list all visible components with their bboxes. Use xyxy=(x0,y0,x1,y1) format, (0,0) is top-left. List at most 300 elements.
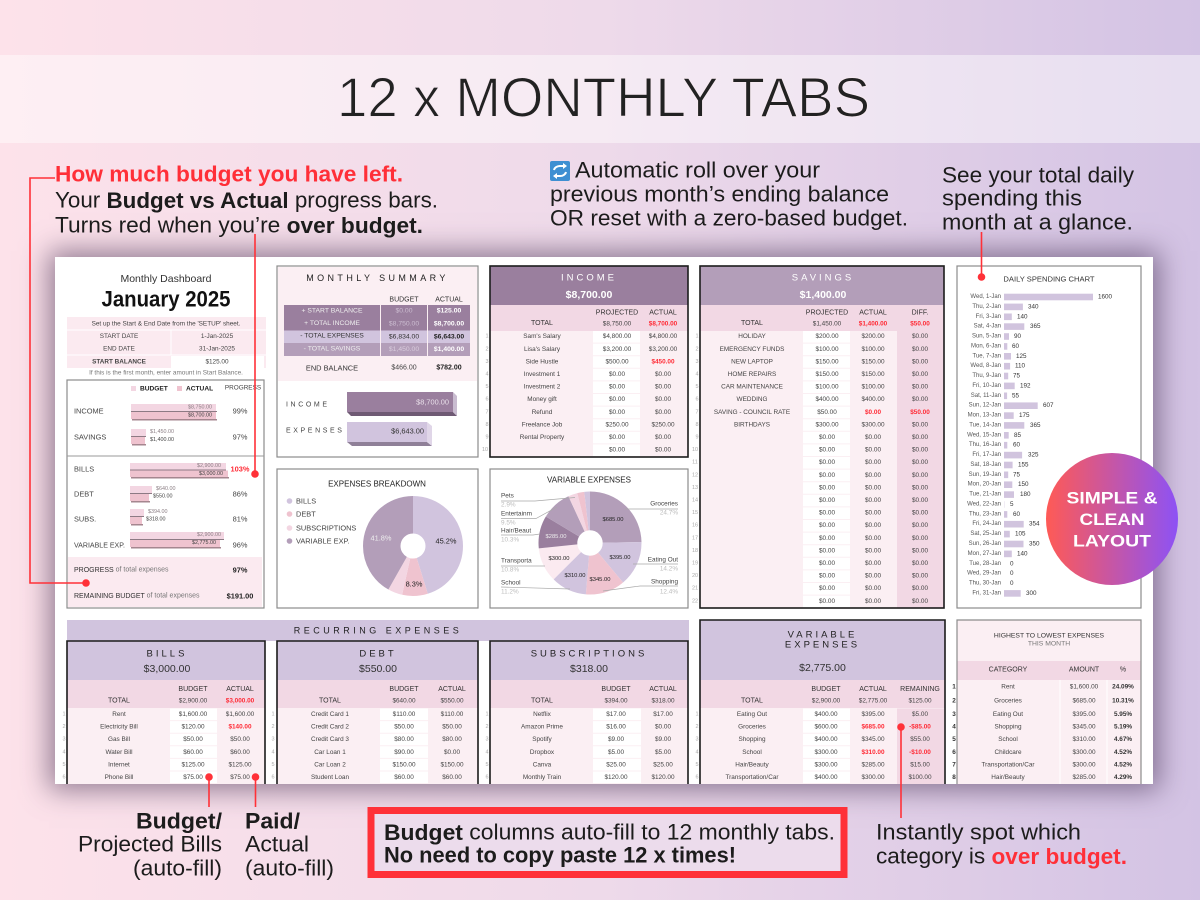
panel: savings table: $0.00 xyxy=(819,484,835,491)
panel: monthly summary: $782.00 xyxy=(436,364,462,372)
heading: SAVINGS xyxy=(792,272,854,284)
panel: income table: $4,800.00 xyxy=(603,333,632,340)
panel: subscriptions table: 4 xyxy=(485,749,489,755)
panel: income table: Investment 2 xyxy=(524,384,561,391)
panel: debt table: DEBT xyxy=(359,648,397,660)
bar chart: 60 xyxy=(1013,511,1021,518)
panel: bills table: Internet xyxy=(108,761,130,768)
panel: savings table: $0.00 xyxy=(819,434,835,441)
panel: variable expenses table: EXPENSES xyxy=(785,640,860,650)
bar chart: 1600 xyxy=(1098,294,1113,300)
panel: savings table: 3 xyxy=(695,359,699,365)
panel: savings table: $0.00 xyxy=(865,535,881,542)
date setup table xyxy=(67,317,266,376)
bar chart: Tue, 28-Jan xyxy=(969,561,1001,567)
callout: automatic roll over: previous month’s ending balance xyxy=(550,182,889,206)
pie chart: $395.00 xyxy=(610,555,630,561)
panel: savings table: $0.00 xyxy=(865,497,881,504)
pie labels and leader lines: 10.8% xyxy=(501,566,519,574)
panel: debt table: $80.00 xyxy=(394,736,414,743)
panel: variable expenses table: $345.00 xyxy=(861,736,885,743)
panel: variable expenses table: $300.00 xyxy=(814,761,838,768)
panel: monthly summary: $466.00 xyxy=(391,364,417,372)
budget vs actual bars: $1,400.00 xyxy=(150,437,174,443)
panel: variable expenses table: $2,900.00 xyxy=(812,698,841,704)
panel: subscriptions table: TOTAL xyxy=(531,698,553,704)
pie labels and leader lines: 12.4% xyxy=(660,588,678,596)
panel: bills table: $2,900.00 xyxy=(179,698,208,704)
panel: savings table: $0.00 xyxy=(912,598,928,605)
date setup table: 1-Jan-2025 xyxy=(201,333,234,340)
panel: variable expenses table: $300.00 xyxy=(861,774,885,781)
date setup table: 31-Jan-2025 xyxy=(199,346,235,352)
legend: VARIABLE EXP. xyxy=(296,536,350,546)
panel: subscriptions table: $17.00 xyxy=(606,711,626,718)
panel: subscriptions table: Monthly Train xyxy=(523,774,562,781)
panel: savings table: $0.00 xyxy=(865,472,881,479)
panel: variable expenses table: $395.00 xyxy=(861,711,885,718)
bar chart: Mon, 27-Jan xyxy=(968,551,1001,557)
panel: debt table: $50.00 xyxy=(394,724,414,731)
panel: bills table: 4 xyxy=(62,749,66,755)
panel: highest to lowest expenses: 2 xyxy=(952,698,956,704)
panel: monthly summary: $1,450.00 xyxy=(389,346,419,353)
expenses bar xyxy=(286,422,432,446)
arrow: over budget bar leader xyxy=(251,234,259,478)
panel: savings table: $0.00 xyxy=(912,535,928,542)
panel: highest to lowest expenses: $300.00 xyxy=(1072,761,1096,768)
date setup table: $125.00 xyxy=(205,358,229,366)
progress bars table: SAVINGS xyxy=(74,432,106,442)
panel: subscriptions table: $25.00 xyxy=(606,761,626,768)
bar chart: 55 xyxy=(1012,392,1020,399)
panel: savings table: EMERGENCY FUNDS xyxy=(720,346,784,353)
panel: expenses breakdown xyxy=(277,469,478,608)
panel: monthly summary: - TOTAL SAVINGS xyxy=(304,346,361,352)
panel: subscriptions table: Dropbox xyxy=(530,749,555,756)
panel: subscriptions table: $9.00 xyxy=(608,736,624,743)
pie chart: $345.00 xyxy=(590,577,610,583)
panel: debt table: TOTAL xyxy=(319,698,341,704)
panel: savings table: 4 xyxy=(695,372,699,378)
panel: bills table: Rent xyxy=(112,711,126,718)
panel: savings table: $0.00 xyxy=(912,510,928,517)
panel: savings table: 19 xyxy=(692,560,698,566)
panel: bills table: 2 xyxy=(62,724,66,730)
panel: bills table: $125.00 xyxy=(181,761,205,768)
date setup table: END DATE xyxy=(103,346,135,352)
progress bars table: 99% xyxy=(233,406,248,416)
panel: income table: ACTUAL xyxy=(649,310,677,316)
panel: variable expenses table: $400.00 xyxy=(814,736,838,743)
panel: income table: 1 xyxy=(485,334,489,340)
panel: savings table: $150.00 xyxy=(815,371,839,378)
panel: highest to lowest expenses: $310.00 xyxy=(1072,736,1096,743)
panel: subscriptions table: $394.00 xyxy=(604,698,628,704)
bar chart: 60 xyxy=(1013,442,1021,449)
callout: budget left: Turns red when you’re over budget. xyxy=(55,212,423,238)
panel: highest to lowest expenses: $345.00 xyxy=(1072,724,1096,731)
panel: variable expenses table: TOTAL xyxy=(741,698,763,704)
progress summary: 97% xyxy=(233,566,248,574)
panel: savings table: $0.00 xyxy=(865,573,881,580)
dashboard sheet xyxy=(55,257,1153,784)
legend: BUDGET xyxy=(140,386,168,392)
panel: income table: PROJECTED xyxy=(596,310,638,316)
pie chart: 41.8% xyxy=(371,534,392,542)
panel: bills table: $60.00 xyxy=(230,749,250,756)
panel: debt table: Credit Card 1 xyxy=(311,711,349,718)
pie labels and leader lines: 9.5% xyxy=(501,520,516,526)
panel: highest to lowest expenses: 6 xyxy=(952,749,956,756)
panel: savings table: $0.00 xyxy=(819,535,835,542)
panel: debt table: 2 xyxy=(271,724,275,730)
panel: monthly summary: $8,700.00 xyxy=(434,320,464,328)
bar chart: Thu, 9-Jan xyxy=(972,373,1001,379)
panel: monthly summary xyxy=(277,266,478,457)
panel: highest to lowest expenses: 24.09% xyxy=(1112,684,1134,690)
panel: savings table: $100.00 xyxy=(815,384,839,391)
bar chart: 350 xyxy=(1029,540,1040,548)
panel: bills table xyxy=(62,641,265,784)
bar chart: 155 xyxy=(1018,462,1029,468)
panel: monthly summary: $6,643.00 xyxy=(434,334,464,340)
panel: debt table: $80.00 xyxy=(442,736,462,743)
callout box: auto-fill: No need to copy paste 12 x times! xyxy=(384,842,736,868)
panel: debt table: $550.00 xyxy=(440,698,464,704)
panel: income table: $500.00 xyxy=(605,358,629,365)
bar chart: 140 xyxy=(1017,550,1028,557)
panel: income table: $0.00 xyxy=(609,371,625,378)
panel: debt table: $150.00 xyxy=(440,761,464,768)
panel: savings table: DIFF. xyxy=(912,310,928,316)
panel: savings table xyxy=(692,266,944,608)
bar chart: 110 xyxy=(1015,363,1026,370)
panel: savings table: $100.00 xyxy=(861,384,885,391)
legend: ACTUAL xyxy=(186,386,213,392)
badge: simple and clean layout: SIMPLE & xyxy=(1066,488,1158,508)
panel: debt table: Credit Card 2 xyxy=(311,724,349,731)
bar chart: 0 xyxy=(1010,580,1014,587)
panel: income table: TOTAL xyxy=(531,320,553,327)
heading: INCOME xyxy=(561,272,617,284)
bar chart: Tue, 7-Jan xyxy=(973,353,1001,359)
panel: monthly summary: + TOTAL INCOME xyxy=(304,320,360,327)
panel: savings table: $0.00 xyxy=(819,459,835,466)
panel: variable expenses table: $100.00 xyxy=(908,774,932,781)
panel: savings table: HOLIDAY xyxy=(738,333,767,340)
income bar xyxy=(286,392,457,416)
panel: income table: $450.00 xyxy=(651,358,675,365)
panel: savings table: $0.00 xyxy=(865,484,881,491)
panel: highest to lowest expenses: Rent xyxy=(1001,684,1015,690)
budget vs actual bars: $2,900.00 xyxy=(197,463,221,469)
panel: highest to lowest expenses: Transportation/Car xyxy=(981,761,1035,768)
bar chart: Sun, 12-Jan xyxy=(969,403,1001,409)
panel: savings table: PROJECTED xyxy=(806,310,848,316)
panel: income table: $3,200.00 xyxy=(649,346,678,353)
bar chart: Wed, 1-Jan xyxy=(970,294,1001,300)
progress bars table: BILLS xyxy=(74,464,94,474)
panel: savings table: 2 xyxy=(695,346,699,352)
panel: savings table: $150.00 xyxy=(815,358,839,365)
panel: subscriptions table: $318.00 xyxy=(651,698,675,704)
panel: bills table: $75.00 xyxy=(230,774,250,781)
panel: bills table: $3,000.00 xyxy=(226,698,255,704)
panel: highest to lowest expenses: School xyxy=(998,736,1018,743)
panel: debt table: $90.00 xyxy=(394,749,414,756)
panel: subscriptions table: SUBSCRIPTIONS xyxy=(531,648,647,660)
legend: PROGRESS xyxy=(225,384,261,392)
panel: variable expenses table: $310.00 xyxy=(861,749,885,756)
panel: income table: Sam's Salary xyxy=(523,333,562,340)
panel: debt table: Car Loan 1 xyxy=(314,749,346,756)
panel: savings table: $0.00 xyxy=(912,333,928,340)
panel: monthly summary: $1,400.00 xyxy=(434,346,464,353)
panel: savings table: $0.00 xyxy=(819,598,835,605)
panel: subscriptions table: $120.00 xyxy=(604,774,628,781)
panel: subscriptions table: Netflix xyxy=(533,711,552,718)
panel: savings table: 14 xyxy=(692,498,698,504)
bar chart: 85 xyxy=(1014,432,1022,439)
pie labels and leader lines: 10.3% xyxy=(501,536,519,544)
panel: bills table: ACTUAL xyxy=(226,686,254,693)
panel: variable expenses table: 5 xyxy=(695,762,699,768)
pie chart: $300.00 xyxy=(549,556,569,562)
panel: highest to lowest expenses: 4.29% xyxy=(1114,774,1132,781)
pie labels and leader lines: Shopping xyxy=(651,578,678,586)
panel: income table: $0.00 xyxy=(609,396,625,403)
panel: income table: Investment 1 xyxy=(524,371,561,378)
progress bars table: 81% xyxy=(233,514,248,524)
progress summary: $191.00 xyxy=(227,592,253,600)
panel: debt table: $110.00 xyxy=(441,711,464,718)
panel: savings table: $50.00 xyxy=(910,320,930,328)
bar chart: 75 xyxy=(1013,471,1021,478)
legend: SUBSCRIPTIONS xyxy=(296,524,356,532)
panel: variable expenses table: Groceries xyxy=(738,724,766,731)
panel: bills table: Water Bill xyxy=(105,749,133,756)
panel: income table: Lisa's Salary xyxy=(524,346,561,353)
pie labels and leader lines: 24.7% xyxy=(660,510,678,516)
callout: budget projected bills: (auto-fill) xyxy=(133,856,222,880)
callout: paid actual: (auto-fill) xyxy=(245,856,334,880)
progress bars table: 97% xyxy=(233,432,248,442)
panel: savings table: $0.00 xyxy=(912,434,928,441)
panel: subscriptions table: $5.00 xyxy=(608,749,624,756)
panel: highest to lowest expenses: 4.52% xyxy=(1114,749,1132,756)
panel: debt table: $150.00 xyxy=(392,761,416,768)
panel: highest to lowest expenses: THIS MONTH xyxy=(1028,640,1070,648)
panel: debt table: 4 xyxy=(271,749,275,755)
panel: savings table: $0.00 xyxy=(819,447,835,454)
panel: savings table: CAR MAINTENANCE xyxy=(721,384,783,391)
panel: income table: Refund xyxy=(532,409,553,416)
panel: variable expenses table: Eating Out xyxy=(737,711,767,718)
panel: variable expenses table: $5.00 xyxy=(912,711,928,718)
panel: savings table: $0.00 xyxy=(912,459,928,466)
pie chart: $310.00 xyxy=(565,573,585,579)
panel: variable expenses table: ACTUAL xyxy=(859,686,887,693)
panel: subscriptions table: $9.00 xyxy=(655,736,671,743)
callout: daily spending: See your total daily xyxy=(942,162,1134,188)
callout box: auto-fill: Budget columns auto-fill to 12 monthly tabs. xyxy=(384,820,835,844)
panel: savings table: 17 xyxy=(692,535,698,541)
panel: subscriptions table: $16.00 xyxy=(606,724,626,731)
panel: savings table: 1 xyxy=(695,334,699,340)
expenses bar: EXPENSES xyxy=(286,428,345,434)
arrow: over budget category leader xyxy=(897,723,905,818)
bar chart: Fri, 24-Jan xyxy=(972,521,1001,527)
panel: savings table: $0.00 xyxy=(912,585,928,592)
arrow: budget left leader xyxy=(30,178,90,587)
panel: savings table: $0.00 xyxy=(819,510,835,517)
panel: highest to lowest expenses: Childcare xyxy=(994,749,1022,756)
panel: subscriptions table: 6 xyxy=(485,774,489,780)
panel: income table: $8,750.00 xyxy=(603,320,632,328)
bar chart: Sat, 11-Jan xyxy=(971,393,1001,399)
date setup table: START BALANCE xyxy=(92,358,147,366)
panel: income table: $0.00 xyxy=(655,384,671,391)
legend xyxy=(131,384,261,392)
callout: budget left xyxy=(55,162,438,238)
pie labels and leader lines xyxy=(501,492,678,596)
bar chart: 365 xyxy=(1030,323,1041,330)
budget vs actual bars: $318.00 xyxy=(146,516,166,522)
panel: variable expenses table: REMAINING xyxy=(900,686,940,693)
panel: highest to lowest expenses: HIGHEST TO LOWEST EXPENSES xyxy=(994,632,1105,640)
panel: subscriptions table: $120.00 xyxy=(651,774,675,781)
panel: subscriptions table: $25.00 xyxy=(653,761,673,768)
panel: debt table: $60.00 xyxy=(442,774,462,781)
panel: income table: $0.00 xyxy=(609,409,625,416)
panel: subscriptions table xyxy=(485,641,688,784)
panel: savings table: $0.00 xyxy=(912,547,928,554)
callout: over budget category xyxy=(876,820,1127,868)
callout: budget projected bills: Budget/ xyxy=(136,808,222,834)
panel: variable expenses table: $300.00 xyxy=(814,749,838,756)
badge: simple and clean layout xyxy=(1046,453,1178,585)
pie chart xyxy=(546,511,630,583)
bar chart: 150 xyxy=(1018,481,1029,488)
panel: income table: 9 xyxy=(485,434,489,440)
panel: debt table: 6 xyxy=(271,774,275,780)
bar chart: Sun, 19-Jan xyxy=(969,472,1001,478)
bar chart: 0 xyxy=(1010,570,1014,577)
panel: subscriptions table: Spotify xyxy=(532,736,553,743)
bar chart: Tue, 21-Jan xyxy=(969,492,1001,498)
panel: bills table: $125.00 xyxy=(228,761,252,768)
panel: savings table: $150.00 xyxy=(861,371,885,378)
panel: savings table: $0.00 xyxy=(912,522,928,529)
panel: debt table: ACTUAL xyxy=(438,686,466,693)
bar chart: Fri, 17-Jan xyxy=(972,452,1001,458)
bar chart: Mon, 20-Jan xyxy=(968,482,1001,488)
panel: savings table: 9 xyxy=(695,434,699,440)
panel: savings table: $0.00 xyxy=(819,547,835,554)
panel: savings table: 20 xyxy=(692,573,698,579)
bar chart: Thu, 30-Jan xyxy=(969,580,1001,586)
income bar: INCOME xyxy=(286,402,330,408)
panel: monthly summary: $0.00 xyxy=(395,308,413,314)
recurring expenses band xyxy=(67,620,689,641)
callout: daily spending: spending this xyxy=(942,186,1082,210)
panel: highest to lowest expenses: 5.95% xyxy=(1114,711,1132,718)
panel: bills table: $50.00 xyxy=(230,736,250,743)
panel: savings table: HOME REPAIRS xyxy=(728,371,776,378)
callout: automatic roll over: Automatic roll over your xyxy=(575,158,820,182)
panel: highest to lowest expenses: 5.19% xyxy=(1114,724,1132,731)
panel: variable expenses table: 3 xyxy=(695,737,699,743)
panel: subscriptions table: $5.00 xyxy=(655,749,671,756)
panel: savings table: 10 xyxy=(692,447,698,453)
panel: savings table: $0.00 xyxy=(912,573,928,580)
bar chart: 75 xyxy=(1013,372,1021,380)
bar chart: 340 xyxy=(1028,303,1039,310)
panel: monthly summary: BUDGET xyxy=(389,296,419,304)
panel: highest to lowest expenses: AMOUNT xyxy=(1069,666,1100,674)
panel: income table: Rental Property xyxy=(520,434,565,441)
recurring expenses band: RECURRING EXPENSES xyxy=(294,626,462,636)
panel: subscriptions table: $0.00 xyxy=(655,724,671,731)
panel: variable expenses table: $685.00 xyxy=(861,724,885,731)
panel: savings table: $0.00 xyxy=(912,396,928,403)
callout: daily spending xyxy=(942,162,1134,234)
panel: highest to lowest expenses: 4.52% xyxy=(1114,761,1132,768)
bar chart: 607 xyxy=(1043,402,1054,409)
panel: bills table: $50.00 xyxy=(183,736,203,743)
callout: automatic roll over xyxy=(550,158,908,230)
budget vs actual bars: $8,700.00 xyxy=(188,412,212,418)
budget vs actual bars xyxy=(130,404,229,548)
panel: bills table: 5 xyxy=(62,762,66,768)
panel: highest to lowest expenses: Hair/Beauty xyxy=(991,774,1025,781)
panel: savings table: NEW LAPTOP xyxy=(731,358,773,365)
callout: over budget category: category is over budget. xyxy=(876,844,1127,868)
bar chart: Fri, 31-Jan xyxy=(972,590,1001,596)
panel: bills table: BILLS xyxy=(147,648,187,660)
expenses bar: $6,643.00 xyxy=(391,426,424,436)
panel: income table: 6 xyxy=(485,397,489,403)
bar chart: 180 xyxy=(1020,491,1031,498)
bar chart: Thu, 23-Jan xyxy=(969,511,1001,517)
panel: savings table: $300.00 xyxy=(815,421,839,428)
panel: savings table: $100.00 xyxy=(861,346,885,353)
panel: savings table: $0.00 xyxy=(819,585,835,592)
bar chart: 60 xyxy=(1012,343,1020,350)
heading xyxy=(561,272,617,301)
panel: variable expenses table: 2 xyxy=(695,724,699,730)
panel: savings table: 15 xyxy=(692,510,698,516)
panel: savings table: $0.00 xyxy=(912,560,928,567)
panel: savings table: $400.00 xyxy=(815,396,839,403)
panel: highest to lowest expenses: % xyxy=(1120,666,1126,674)
legend: DEBT xyxy=(296,510,316,518)
callout: budget projected bills: Projected Bills xyxy=(78,832,222,856)
panel: variable expenses table: 1 xyxy=(695,712,699,718)
panel: monthly summary: $125.00 xyxy=(437,308,461,314)
panel: savings table: $0.00 xyxy=(819,472,835,479)
panel: debt table: Car Loan 2 xyxy=(314,761,346,768)
panel: savings table: 8 xyxy=(695,422,699,428)
panel: savings table: 22 xyxy=(692,598,698,604)
progress bars table: 86% xyxy=(233,490,248,498)
panel: income table: $0.00 xyxy=(655,447,671,454)
heading: MONTHLY SUMMARY xyxy=(306,273,449,283)
panel: income table: $250.00 xyxy=(605,421,629,428)
bar chart: 192 xyxy=(1020,382,1031,389)
panel: variable expenses table xyxy=(695,620,945,784)
